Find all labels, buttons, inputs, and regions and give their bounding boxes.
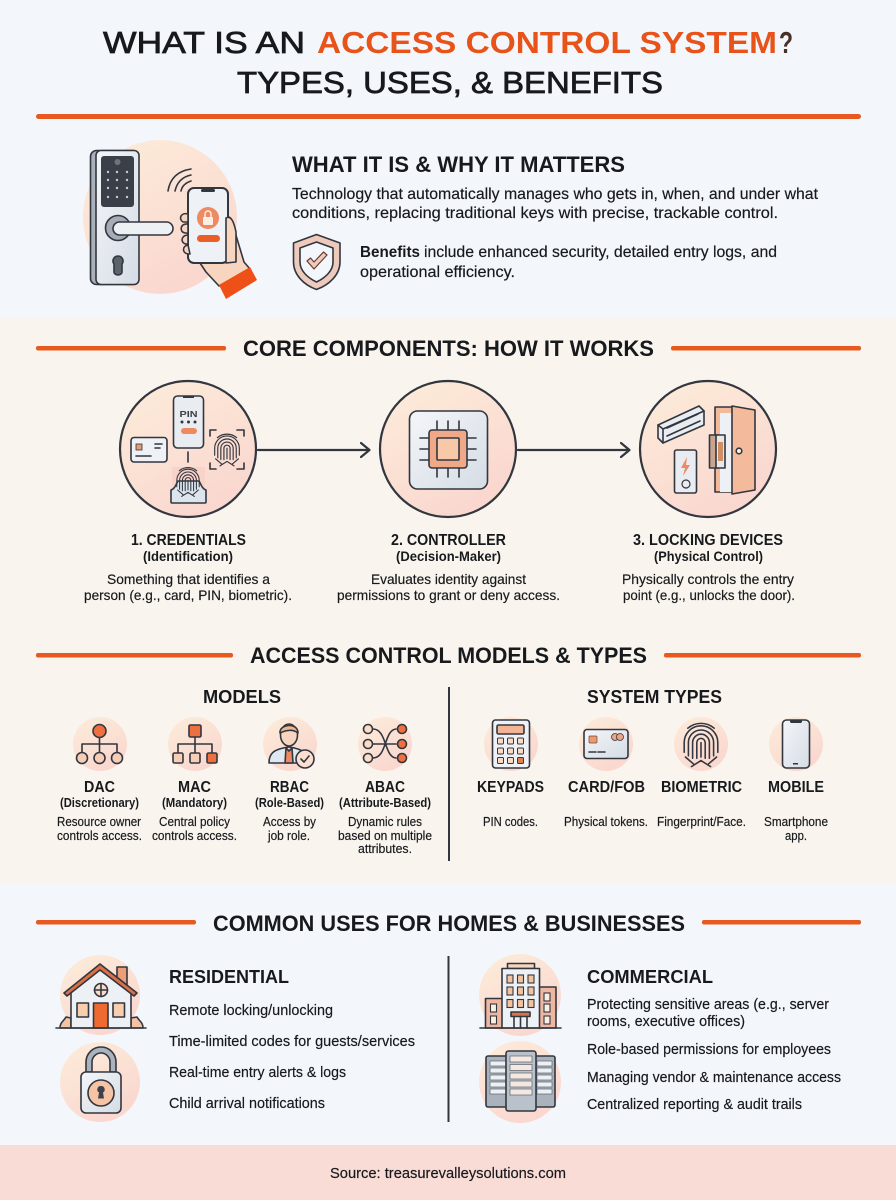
icon: office building [479, 954, 561, 1036]
model: DAC: Resource owner [57, 815, 141, 829]
heading: what it is: WHAT IT IS & WHY IT MATTERS [292, 152, 625, 177]
model: DAC: controls access. [57, 829, 142, 843]
footer: source: Source: treasurevalleysolutions.com [330, 1165, 566, 1182]
illustration: smart lock and phone [83, 140, 257, 299]
icon: padlock [60, 1042, 140, 1122]
model: DAC: (Discretionary) [60, 796, 139, 810]
heading: common uses: COMMON USES FOR HOMES & BUSINESSES [213, 911, 685, 936]
label: controller: (Decision-Maker) [396, 548, 501, 564]
type: keypads: KEYPADS [477, 779, 544, 796]
model: ABAC: (Attribute-Based) [339, 796, 431, 810]
model: MAC [152, 717, 237, 843]
label: controller: Evaluates identity against [371, 571, 526, 587]
type: mobile: MOBILE [768, 779, 824, 796]
heading: commercial: COMMERCIAL [587, 967, 713, 987]
label: locking devices: 3. LOCKING DEVICES [633, 532, 783, 549]
type: keypads: PIN codes. [483, 815, 538, 829]
label: locking devices [622, 532, 795, 603]
model: ABAC [338, 717, 432, 856]
description: conditions, replacing traditional keys with precise, trackable control. [292, 205, 778, 222]
list: residential uses [169, 1002, 415, 1112]
list: commercial uses: Role-based permissions for employees [587, 1042, 831, 1058]
list: residential uses: Time-limited codes for guests/services [169, 1033, 415, 1050]
type: biometric: BIOMETRIC [661, 779, 742, 796]
type: card or fob [564, 717, 648, 829]
label: controller: 2. CONTROLLER [391, 532, 506, 549]
list: commercial uses: Protecting sensitive areas (e.g., server [587, 997, 829, 1013]
arrow: credentials to controller [258, 443, 370, 457]
icon: controller chip [380, 381, 516, 517]
model: MAC: controls access. [152, 829, 237, 843]
panel: credentials [84, 381, 292, 603]
icon: house [56, 955, 146, 1035]
panel: models [57, 687, 432, 856]
benefits text: operational efficiency. [360, 264, 515, 281]
model: ABAC: attributes. [358, 842, 412, 856]
description [292, 186, 819, 222]
heading: models: MODELS [203, 687, 281, 707]
benefits text [360, 244, 777, 281]
model: RBAC [255, 717, 324, 843]
label: controller: permissions to grant or deny access. [337, 587, 560, 603]
panel: commercial [479, 954, 841, 1123]
label: credentials: person (e.g., card, PIN, biometric). [84, 587, 292, 603]
list: residential uses: Remote locking/unlocking [169, 1002, 333, 1019]
list: commercial uses: Centralized reporting & audit trails [587, 1097, 802, 1113]
heading: core components [36, 336, 861, 361]
list: residential uses: Real-time entry alerts & logs [169, 1064, 346, 1081]
type: mobile: Smartphone [764, 815, 828, 829]
title: WHAT IS AN [103, 25, 305, 60]
label: locking devices: (Physical Control) [654, 548, 763, 564]
panel: what it is [83, 140, 819, 299]
label: credentials [84, 532, 292, 603]
description: Technology that automatically manages who gets in, when, and under what [292, 186, 819, 203]
model: RBAC: Access by [263, 815, 317, 829]
panel: locking devices [622, 381, 795, 603]
model: ABAC: Dynamic rules [348, 815, 422, 829]
model: RBAC: job role. [267, 829, 310, 843]
type: keypads [477, 717, 544, 829]
heading: residential: RESIDENTIAL [169, 967, 289, 987]
panel: system types [477, 687, 828, 843]
type: biometric [657, 717, 746, 829]
list: commercial uses: rooms, executive offices) [587, 1014, 745, 1030]
footer: source [0, 1145, 896, 1200]
heading: models and types [36, 643, 861, 668]
heading: common uses [36, 911, 861, 936]
title: TYPES, USES, & BENEFITS [237, 65, 663, 100]
benefits text: Benefits [360, 244, 420, 261]
model: ABAC: ABAC [365, 779, 405, 796]
background: uses section [0, 883, 896, 1145]
title [103, 25, 793, 100]
model: MAC: Central policy [159, 815, 231, 829]
model: MAC: MAC [178, 779, 211, 796]
heading: models and types: ACCESS CONTROL MODELS & TYPES [250, 643, 647, 668]
list: commercial uses: Managing vendor & maintenance access [587, 1070, 841, 1086]
label: credentials: (Identification) [143, 548, 233, 564]
benefits text: include enhanced security, detailed entry logs, and [424, 244, 777, 261]
label: credentials: Something that identifies a [107, 571, 270, 587]
background: components and models section [0, 317, 896, 883]
model: ABAC: based on multiple [338, 829, 432, 843]
icon: shield check [294, 234, 340, 290]
background: intro section [0, 0, 896, 317]
label: locking devices: Physically controls the entry [622, 571, 794, 587]
model: DAC: DAC [84, 779, 115, 796]
list: residential uses: Child arrival notifications [169, 1095, 325, 1112]
panel: residential [56, 955, 415, 1122]
icon: locking devices [640, 381, 776, 517]
title: ACCESS CONTROL SYSTEM [317, 25, 777, 60]
type: card or fob: CARD/FOB [568, 779, 645, 796]
type: mobile: app. [785, 829, 807, 843]
type: mobile [764, 717, 828, 843]
model: RBAC: RBAC [270, 779, 309, 796]
label: controller [337, 532, 560, 603]
model: DAC [57, 717, 142, 843]
title: ? [779, 25, 793, 60]
heading: system types: SYSTEM TYPES [587, 687, 722, 707]
label: credentials: 1. CREDENTIALS [131, 532, 246, 549]
type: card or fob: Physical tokens. [564, 815, 648, 829]
icon: server racks [479, 1041, 561, 1123]
model: MAC: (Mandatory) [162, 796, 227, 810]
label: locking devices: point (e.g., unlocks the door). [623, 587, 795, 603]
panel: controller [337, 381, 560, 603]
icon: credentials circle: PIN [180, 409, 198, 419]
list: commercial uses [587, 997, 841, 1113]
type: biometric: Fingerprint/Face. [657, 815, 746, 829]
arrow: controller to locking devices [518, 443, 630, 457]
model: RBAC: (Role-Based) [255, 796, 324, 810]
heading: core components: CORE COMPONENTS: HOW IT WORKS [243, 336, 654, 361]
icon: credentials circle [120, 381, 256, 517]
